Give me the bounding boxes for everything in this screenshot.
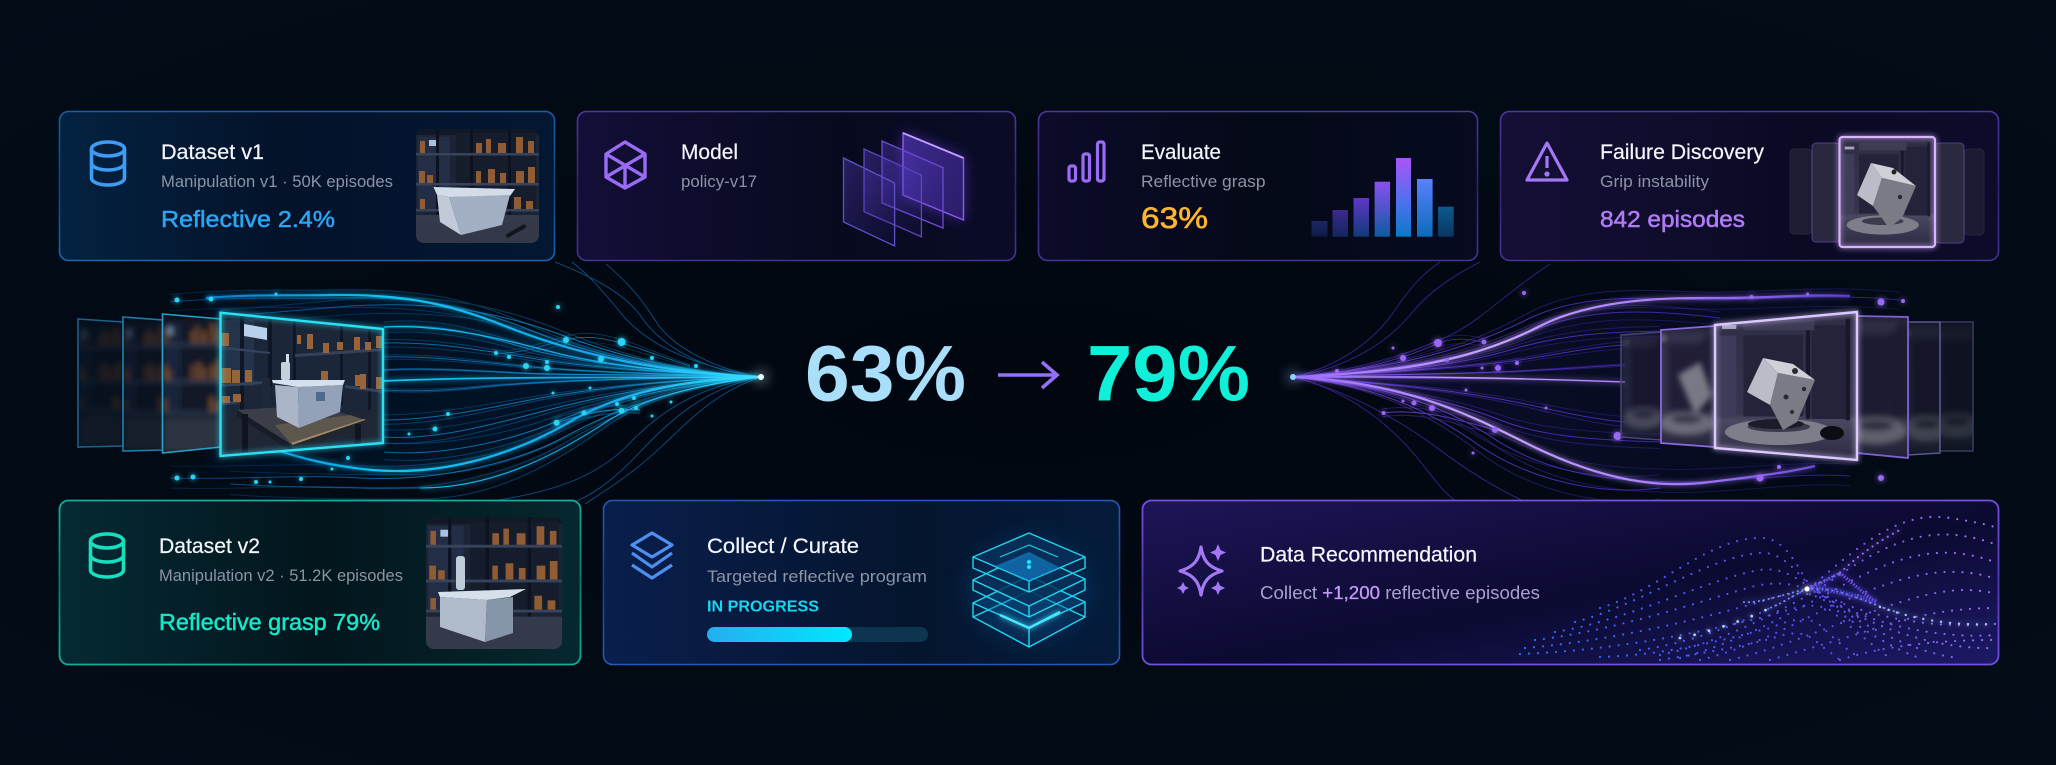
main cube frame [1715, 312, 1857, 462]
title: Dataset v1 [161, 141, 264, 164]
title: Dataset v2 [159, 535, 260, 558]
photo: warehouse box with figure [426, 517, 562, 649]
subtitle: Manipulation v2 · 51.2K episodes [159, 567, 403, 585]
panel: Dataset v1 [60, 112, 554, 260]
subtitle with highlighted number: Collect +1,200 reflective episodes [1260, 583, 1540, 603]
metric: Reflective grasp 79% [159, 609, 380, 635]
subtitle: Targeted reflective program [707, 568, 927, 586]
panel: Data Recommendation [1142, 500, 1998, 664]
title: Collect / Curate [707, 535, 859, 558]
stacked planes graphic [969, 533, 1089, 647]
status label: IN PROGRESS [707, 599, 819, 616]
central comparison: 63% to 79% [805, 328, 1250, 418]
before value: 63% [805, 328, 966, 418]
main warehouse frame [220, 312, 383, 458]
icon: database [92, 142, 124, 185]
bar chart [1312, 158, 1454, 237]
box [275, 385, 299, 428]
title: Failure Discovery [1600, 141, 1764, 164]
subtitle: Reflective grasp [1141, 173, 1266, 191]
table [238, 408, 349, 444]
title: Evaluate [1141, 141, 1221, 164]
title: Model [681, 141, 738, 164]
icon: sparkles [1177, 544, 1226, 595]
photo: warehouse box [416, 129, 539, 243]
wave particle graphic [1520, 517, 1997, 660]
icon: database [90, 534, 124, 577]
metric: 842 episodes [1600, 206, 1745, 232]
panel: Model [578, 112, 1016, 260]
metric: Reflective 2.4% [161, 206, 335, 232]
icon: bars [1069, 142, 1104, 181]
panel: Collect / Curate [604, 500, 1120, 664]
progress bar [707, 627, 928, 642]
panel: Evaluate [1038, 112, 1478, 260]
metric: 63% [1141, 202, 1208, 235]
image stack: cube [1790, 137, 1984, 247]
right data flow: streams of lines fanning out [1290, 262, 1905, 504]
panel: Dataset v2 [60, 500, 580, 664]
bright wave crest [1680, 530, 1990, 638]
subtitle: Manipulation v1 · 50K episodes [161, 173, 393, 191]
right image stack: tumbling cube frames [1621, 312, 1990, 462]
left image stack: warehouse frames [78, 312, 383, 458]
icon: stacked layers [632, 533, 672, 578]
title: Data Recommendation [1260, 544, 1477, 566]
subtitle: policy-v17 [681, 173, 757, 191]
icon: cube [606, 142, 645, 188]
subtitle: Grip instability [1600, 173, 1710, 191]
layered planes graphic [844, 133, 964, 246]
icon: warning triangle [1527, 143, 1567, 180]
arrow [998, 362, 1057, 388]
panel: Failure Discovery [1500, 112, 1998, 260]
left data flow: streams of lines converging on a point [170, 262, 764, 504]
after value: 79% [1087, 328, 1250, 418]
